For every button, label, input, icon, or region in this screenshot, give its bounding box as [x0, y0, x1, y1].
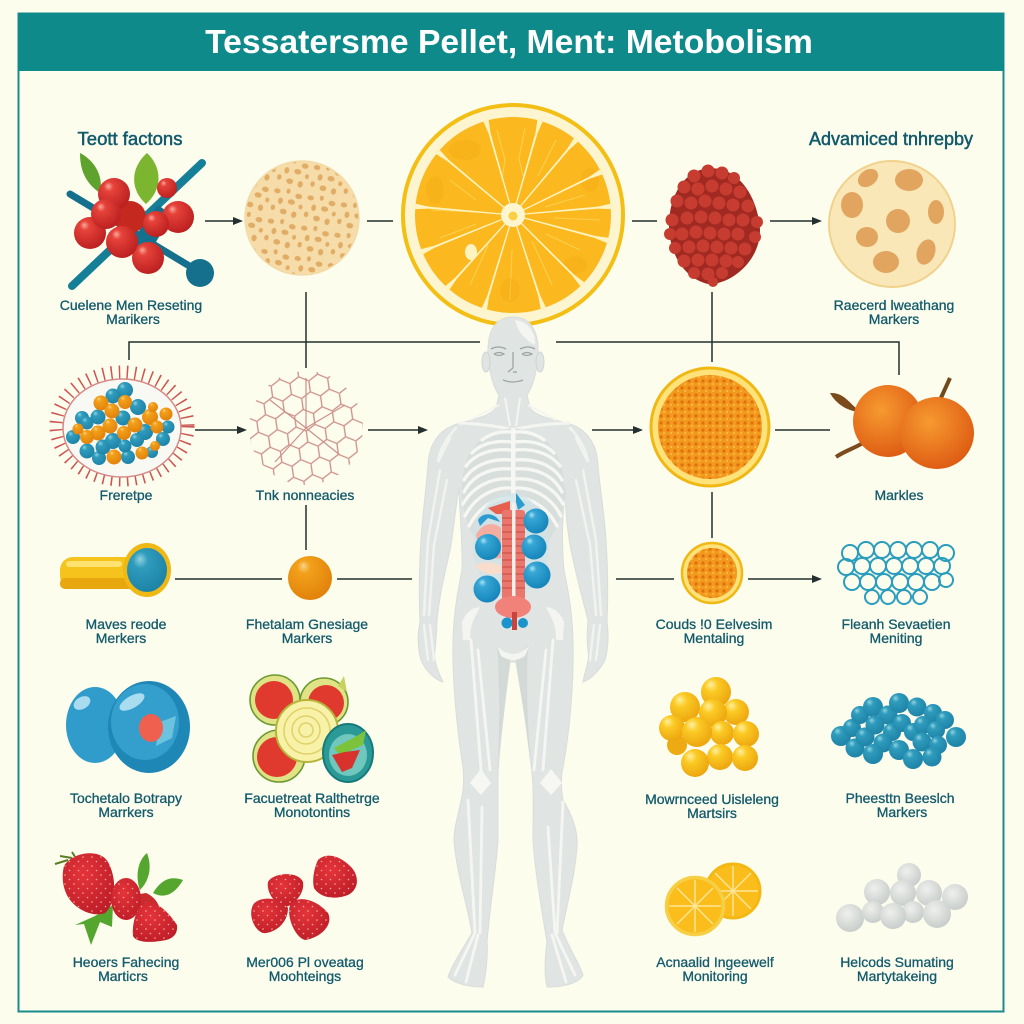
body: pelvis	[462, 607, 564, 660]
icon: blue kidney shapes	[66, 681, 190, 773]
body: thigh shading	[497, 645, 531, 770]
label: row 4 col 1: Tochetalo Botrapy	[70, 790, 182, 806]
label: row 3 col 1: Merkers	[96, 630, 146, 646]
body: ribs right	[515, 432, 563, 526]
icon: small orange circle	[682, 543, 742, 603]
title banner	[18, 13, 1004, 71]
icon: strawberries with leaves	[55, 852, 183, 945]
icon: blue hexagon network	[838, 542, 954, 604]
label: row 3 col 5: Meniting	[870, 630, 922, 646]
heading: left column: Teott factons	[78, 128, 182, 149]
icon: citrus slice	[403, 105, 623, 325]
label: row 5 col 2: Moohteings	[269, 968, 341, 984]
body: face	[491, 347, 535, 382]
icon: lemon slices	[666, 864, 760, 934]
label: row 5 col 5: Martytakeing	[857, 968, 937, 984]
label: row 4 col 2: Facuetreat Ralthetrge	[244, 790, 380, 806]
icon: golden bead cluster	[659, 677, 759, 777]
icon: porous tan cell	[245, 161, 359, 275]
icon: red bead cluster	[664, 164, 763, 287]
icon: orange sphere	[288, 556, 332, 600]
icon: orange fruits	[830, 378, 974, 469]
body: sternum	[511, 428, 516, 538]
connector lines and arrows	[129, 217, 899, 583]
icon: red berries	[251, 856, 357, 940]
heading: right column: Advamiced tnhrepby	[809, 129, 973, 149]
label: row 1 col 1: Marikers	[106, 311, 160, 327]
body: leg bones	[455, 640, 575, 982]
icon: blue and orange cell cluster	[56, 372, 188, 480]
icon: orange textured circle	[651, 368, 769, 486]
label: row 3 col 2: Markers	[282, 630, 332, 646]
label: row 1 col 5: Raecerd lweathang	[834, 297, 954, 313]
label: row 5 col 4: Acnaalid Ingeewelf	[656, 954, 774, 970]
label: row 2 col 1: Freretpe	[100, 487, 153, 503]
icon: fruit cross-sections	[250, 675, 373, 782]
label: row 3 col 4: Mentaling	[684, 630, 744, 646]
label: row 1 col 5: Markers	[869, 311, 919, 327]
label: row 5 col 2: Mer006 Pl oveatag	[246, 954, 364, 970]
body: ears	[482, 352, 544, 372]
body: head highlight	[515, 320, 535, 345]
body: rib cage	[462, 428, 564, 545]
body: neck and clavicles	[458, 398, 570, 430]
label: row 5 col 4: Monitoring	[682, 968, 748, 984]
body: arm and limb highlights	[424, 428, 601, 660]
label: row 3 col 2: Fhetalam Gnesiage	[246, 616, 368, 632]
icon: molecule with red berries	[70, 153, 214, 287]
label: row 4 col 5: Markers	[877, 804, 927, 820]
label: row 5 col 1: Heoers Fahecing	[73, 954, 179, 970]
label: row 4 col 5: Pheesttn Beeslch	[846, 790, 954, 806]
label: row 5 col 5: Helcods Sumating	[840, 954, 954, 970]
icon: red cell network	[250, 372, 363, 485]
label: row 4 col 1: Marrkers	[98, 804, 154, 820]
icon: blue bead cluster	[831, 693, 966, 769]
icon: human body figure	[418, 317, 608, 987]
body: knee joints	[470, 769, 562, 795]
body: ribs left	[463, 432, 511, 526]
label: row 2 col 2: Tnk nonneacies	[256, 487, 354, 503]
label: row 5 col 1: Marticrs	[98, 968, 148, 984]
icon: cream cell with spots	[829, 161, 955, 287]
label: row 3 col 4: Couds !0 Eelvesim	[656, 616, 772, 632]
label: row 4 col 4: Mowrnceed Uisleleng	[645, 791, 779, 807]
label: row 3 col 1: Maves reode	[86, 616, 166, 632]
label: row 3 col 5: Fleanh Sevaetien	[842, 616, 950, 632]
label: row 1 col 1: Cuelene Men Reseting	[60, 297, 202, 313]
icon: yellow capsule	[60, 543, 171, 597]
body: organs	[473, 493, 550, 630]
icon: white bead cluster	[836, 863, 968, 932]
title banner: Tessatersme Pellet, Ment: Metobolism	[205, 23, 813, 61]
label: row 4 col 4: Martsirs	[687, 805, 737, 821]
label: row 2 col 5: Markles	[874, 487, 924, 503]
label: row 4 col 2: Monotontins	[274, 804, 350, 820]
